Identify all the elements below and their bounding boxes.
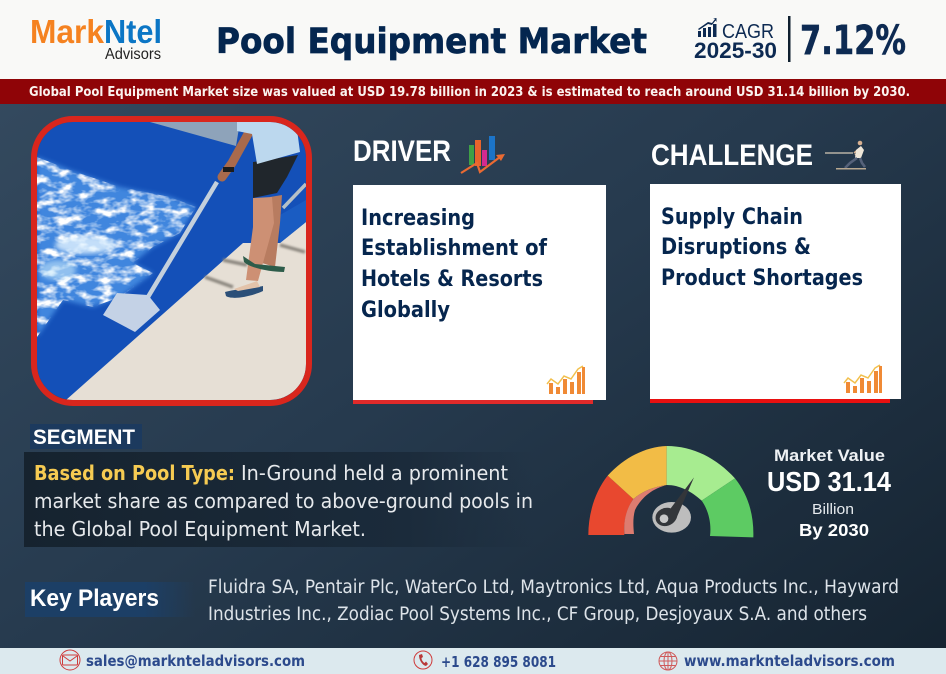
CAGR value: 7.12%	[800, 18, 906, 64]
icon: mail	[60, 650, 80, 670]
panel: segment	[24, 424, 534, 547]
photo: person skimming a pool	[34, 119, 309, 403]
gauge	[588, 446, 753, 537]
photo frame	[34, 119, 309, 403]
CAGR block	[694, 16, 906, 64]
website contact: www.marknteladvisors.com	[684, 652, 895, 670]
header band	[0, 0, 946, 79]
gauge inner band	[624, 485, 667, 534]
segment text	[24, 452, 534, 547]
email contact: sales@marknteladvisors.com	[86, 652, 305, 670]
phone contact	[414, 651, 556, 671]
gauge needle	[656, 477, 694, 526]
gauge knob	[652, 502, 691, 533]
gauge red segment	[588, 476, 633, 535]
challenge card accent	[650, 399, 890, 403]
icon: driver card chart	[547, 366, 585, 394]
sandals	[225, 286, 263, 298]
phone contact: +1 628 895 8081	[441, 653, 556, 671]
CAGR period: 2025-30	[694, 38, 777, 63]
icon: driver chart	[461, 136, 505, 173]
driver text: Hotels & Resorts	[361, 267, 543, 292]
driver text	[361, 206, 547, 323]
shorts	[253, 155, 298, 198]
driver text: Globally	[361, 298, 450, 323]
segment text: In-Ground held a prominent	[241, 461, 508, 485]
wrist band	[223, 167, 234, 172]
logo: MarkNtel Advisors: Ntel	[104, 13, 162, 50]
key players list: Fluidra SA, Pentair Plc, WaterCo Ltd, Maytronics Ltd, Aqua Products Inc., Hayward	[208, 577, 899, 598]
footer contact bar	[0, 648, 946, 674]
logo: MarkNtel Advisors: Mark	[30, 13, 105, 50]
market value: USD 31.14	[767, 466, 891, 497]
left leg	[246, 197, 274, 281]
panel: driver	[353, 135, 606, 404]
ladder	[283, 184, 306, 208]
market value: By 2030	[799, 520, 869, 540]
icon: challenge card chart	[844, 365, 882, 393]
shirt	[237, 122, 300, 164]
title: Pool Equipment Market	[216, 22, 647, 62]
market value	[767, 447, 891, 540]
gauge light green segment	[667, 446, 735, 501]
panel: key players	[25, 577, 899, 625]
rippling water	[37, 150, 202, 340]
market value: Market Value	[774, 447, 885, 465]
far deck	[150, 122, 240, 146]
arm	[222, 134, 248, 177]
market value: Billion	[812, 502, 854, 518]
person	[222, 122, 300, 298]
right leg	[262, 195, 282, 267]
challenge text: Product Shortages	[661, 266, 863, 291]
segment text: market share as compared to above-ground pools in	[34, 489, 533, 513]
gauge yellow segment	[608, 446, 667, 499]
key players list: Industries Inc., Zodiac Pool Systems Inc., CF Group, Desjoyaux S.A. and others	[208, 604, 867, 625]
driver card accent	[353, 400, 593, 404]
skimmer pole	[148, 182, 217, 297]
concrete deck	[66, 222, 306, 400]
icon: growth bars	[698, 18, 716, 37]
challenge heading: CHALLENGE	[651, 139, 813, 172]
key players heading	[25, 582, 195, 617]
panel: challenge	[650, 139, 901, 403]
segment text: the Global Pool Equipment Market.	[34, 517, 366, 541]
logo: MarkNtel Advisors	[30, 13, 162, 63]
driver card	[353, 185, 606, 400]
key players heading: Key Players	[30, 585, 159, 612]
gauge hub	[660, 514, 668, 523]
challenge text: Supply Chain	[661, 205, 803, 230]
driver heading: DRIVER	[353, 135, 451, 168]
key players list	[208, 577, 899, 625]
challenge text	[661, 205, 863, 291]
segment text: Based on Pool Type:	[34, 461, 235, 485]
driver text: Increasing	[361, 206, 475, 231]
challenge card	[650, 184, 901, 399]
gauge green segment	[702, 478, 753, 537]
CAGR label: CAGR	[722, 21, 774, 43]
segment heading: SEGMENT	[33, 426, 135, 449]
shadows	[205, 245, 305, 287]
icon: tug of war figure	[825, 141, 866, 170]
driver text: Establishment of	[361, 236, 547, 261]
icon: globe	[659, 652, 677, 670]
divider	[788, 16, 790, 62]
challenge text: Disruptions &	[661, 235, 811, 260]
logo: MarkNtel Advisors: Advisors	[105, 46, 161, 63]
icon: phone	[414, 651, 432, 669]
summary banner	[0, 79, 946, 104]
skimmer net	[103, 293, 160, 332]
